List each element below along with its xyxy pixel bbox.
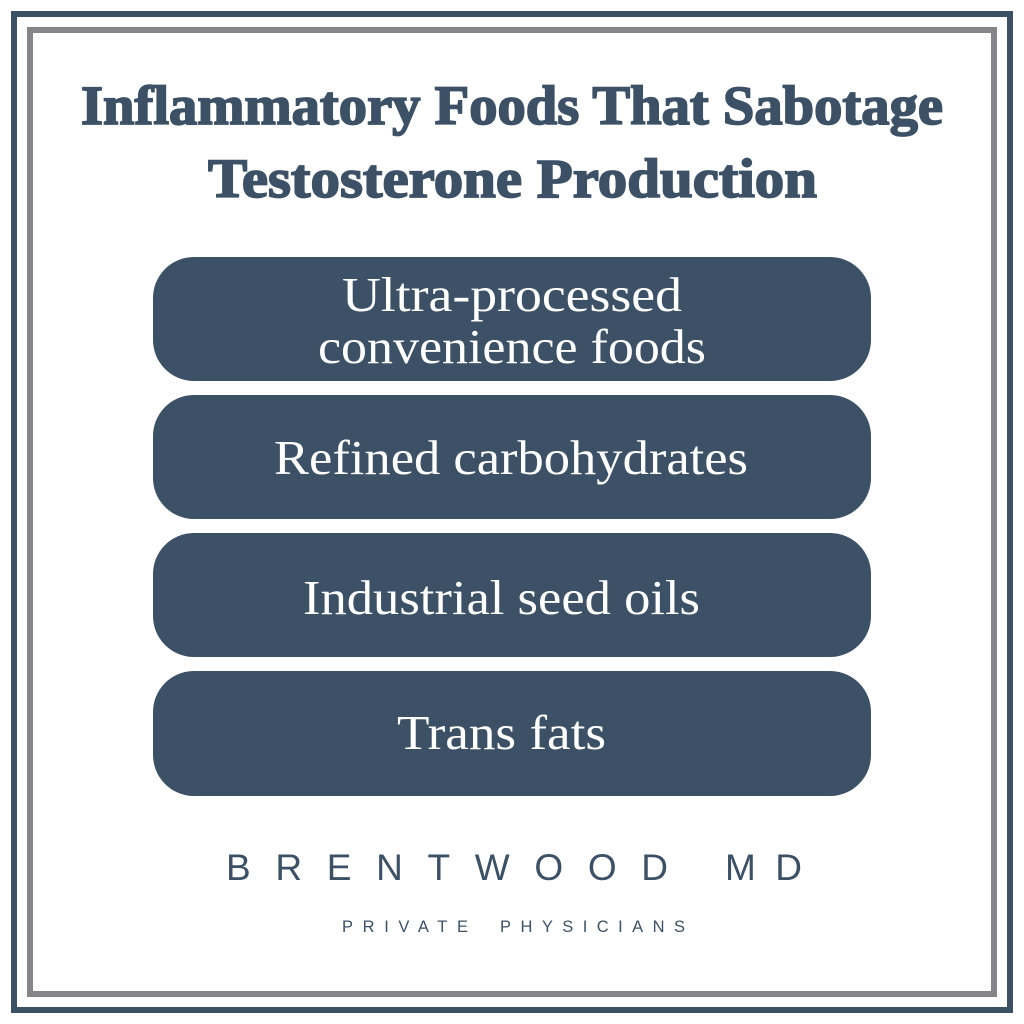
title: Testosterone Production: [208, 148, 817, 209]
panel: trans fats: Trans fats: [397, 705, 606, 760]
panel: ultra-processed convenience foods: Ultra-processed: [342, 267, 682, 322]
logo: Brentwood MD Private Physicians: PHYSICIANS: [500, 918, 685, 936]
title: [81, 75, 943, 209]
panel: trans fats: [153, 671, 871, 796]
panel: ultra-processed convenience foods: convenience foods: [318, 319, 706, 374]
logo: Brentwood MD Private Physicians: MD: [725, 847, 802, 888]
panel: ultra-processed convenience foods: [153, 257, 871, 381]
panel: refined carbohydrates: [153, 395, 871, 519]
logo: Brentwood MD Private Physicians: PRIVATE: [342, 918, 468, 936]
panel: industrial seed oils: Industrial seed oils: [303, 570, 700, 625]
panel: refined carbohydrates: Refined carbohydrates: [274, 430, 748, 485]
panel: industrial seed oils: [153, 533, 871, 657]
title: Inflammatory Foods That Sabotage: [81, 75, 943, 136]
logo: Brentwood MD Private Physicians: [226, 847, 802, 936]
logo: Brentwood MD Private Physicians: BRENTWOOD: [226, 847, 668, 888]
